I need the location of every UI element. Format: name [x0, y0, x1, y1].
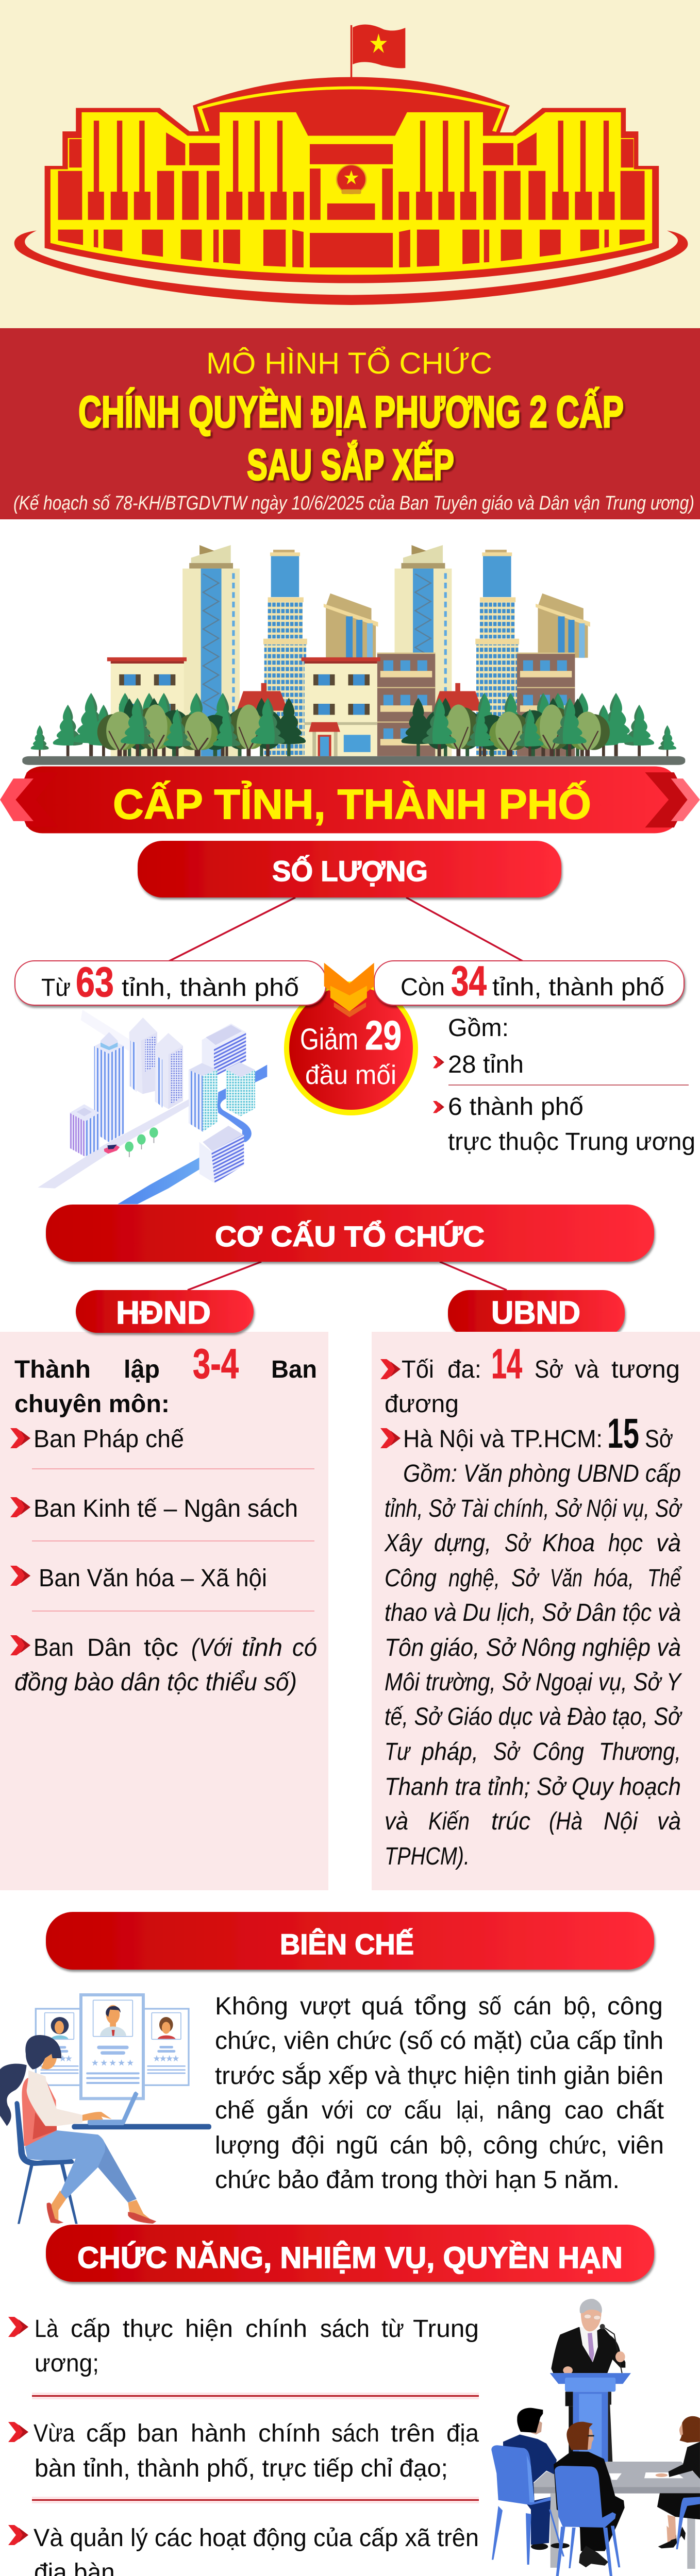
text block: list of departments: Công: [532, 1738, 584, 1766]
desk: [72, 2124, 211, 2129]
text block: staffing: số: [478, 1993, 502, 2020]
text block: list of departments: Xây: [384, 1530, 423, 1557]
item: ethnic committee: tộc: [144, 1634, 178, 1662]
table: [529, 2462, 700, 2569]
text block: staffing: chất: [616, 2097, 664, 2124]
title line 1: MÔ HÌNH TỔ CHỨC: [206, 347, 492, 380]
text block: staffing: Không: [215, 1993, 288, 2020]
building silhouette: [45, 77, 659, 283]
intro: 3-4 committees: 3-4: [193, 1341, 239, 1387]
item: maximum 14 departments: [380, 1341, 680, 1418]
pill: remaining 34 provinces: 34: [451, 958, 487, 1005]
item: implementing level: thực: [123, 2315, 173, 2343]
icon: parliament building with flag: [14, 24, 688, 305]
text block: list of departments: Khoa: [542, 1530, 595, 1557]
heading: Cơ cấu tổ chức: CƠ CẤU TỔ CHỨC: [215, 1220, 485, 1252]
item: implementing level: Là: [35, 2315, 58, 2343]
text block: list of departments: Kiến: [428, 1808, 470, 1835]
text block: list of departments: [384, 1460, 682, 1870]
podium: [550, 2373, 631, 2462]
text block: list of departments: TPHCM).: [385, 1843, 470, 1870]
chair: [14, 2101, 78, 2224]
connector lines: quantity: [169, 897, 523, 961]
item: implementing level: cấp: [71, 2315, 110, 2343]
item: maximum 14 departments: 14: [491, 1341, 522, 1387]
attendee left: [491, 2408, 570, 2565]
item: implementing level: hiện: [185, 2315, 233, 2343]
item: Hanoi and HCMC 15 departments: 15: [607, 1410, 639, 1457]
text block: staffing: với: [322, 2097, 354, 2124]
item: maximum 14 departments: Tối: [402, 1356, 434, 1383]
text block: list of departments: và: [385, 1808, 408, 1835]
CV cards: [36, 1995, 189, 2098]
pill: from 63 provinces: [15, 959, 326, 1006]
item: ethnic committee: có: [292, 1634, 317, 1662]
text block: staffing: bộ,: [440, 2132, 473, 2159]
badge: Giảm 29 đầu mối: [284, 981, 418, 1115]
item: ethnic committee: [10, 1634, 317, 1696]
panel: HĐND: [0, 1332, 328, 1890]
text block: staffing: tổng: [414, 1993, 467, 2020]
item: implementing level: [8, 2315, 479, 2377]
text block: staffing: trước sắp xếp và thực hiện tinh giản biên: [215, 2062, 663, 2090]
text block: staffing: chức,: [549, 2132, 607, 2159]
text block: list of departments: học: [608, 1530, 643, 1557]
pill: remaining 34 provinces: Còn: [401, 974, 445, 1001]
text block: list of departments: Tư: [385, 1738, 411, 1766]
text block: staffing: gắn: [266, 2096, 309, 2124]
item: policy issuing level: hành: [191, 2420, 246, 2447]
text block: staffing: cơ: [366, 2097, 392, 2124]
badge: Giảm 29 đầu mối: 29: [365, 1012, 402, 1058]
illustration: cityscape: [22, 545, 685, 765]
swoosh under the building: [14, 231, 688, 305]
item: implementing level: sách: [320, 2315, 370, 2343]
item: ethnic committee: (Với: [191, 1634, 232, 1662]
illustration: meeting with speaker: [491, 2299, 700, 2576]
intro: 3-4 committees: [14, 1341, 317, 1418]
heading: Số lượng: SỐ LƯỢNG: [272, 855, 428, 887]
text block: staffing: chức bảo đảm trong thời hạn 5 năm.: [215, 2166, 620, 2194]
text block: list of departments: nghệ,: [448, 1565, 500, 1592]
item: maximum 14 departments: Sở: [535, 1356, 563, 1383]
text block: list of departments: Thương,: [599, 1738, 681, 1766]
text block: staffing: bộ,: [563, 1993, 597, 2020]
title line 3: SAU SẮP XẾP: [247, 440, 454, 489]
item: maximum 14 departments: đa:: [447, 1356, 481, 1383]
connector lines: structure: [188, 1262, 507, 1290]
laptop: [88, 2091, 139, 2125]
text block: staffing: cấu: [404, 2097, 442, 2124]
text block: staffing: vượt: [300, 1993, 351, 2020]
intro: 3-4 committees: lập: [124, 1356, 160, 1383]
illustration: woman reviewing CVs: [0, 1995, 211, 2224]
text block: staffing: [215, 1993, 664, 2194]
text block: list of departments: trúc: [491, 1808, 530, 1835]
text block: staffing: viên: [618, 2132, 664, 2159]
intro: 3-4 committees: Ban: [271, 1356, 317, 1383]
text block: list of departments: Thể: [647, 1565, 682, 1592]
text block: list of departments: Thanh tra tỉnh; Sở Quy hoạch: [385, 1773, 681, 1801]
list: composition: [433, 1014, 695, 1156]
intro: 3-4 committees: chuyên môn:: [14, 1391, 170, 1418]
panel: UBND: [372, 1332, 700, 1890]
item: implementing level: ương;: [35, 2350, 99, 2377]
item: ethnic committee: Ban: [34, 1634, 74, 1662]
pill: from 63 provinces: 63: [76, 959, 114, 1006]
text block: list of departments: Sở: [511, 1565, 540, 1592]
item: policy issuing level: sách: [331, 2420, 379, 2447]
speaker: [551, 2299, 625, 2462]
text block: list of departments: và: [656, 1530, 681, 1557]
item: policy issuing level: bàn tỉnh, thành phố, trực tiếp chỉ đạo;: [35, 2455, 448, 2482]
heading: Chức năng, nhiệm vụ, quyền hạn: [46, 2225, 654, 2282]
item: policy issuing level: Vừa: [34, 2420, 75, 2447]
item: policy issuing level: trên: [391, 2420, 435, 2447]
item: implementing level: chính: [245, 2315, 307, 2343]
text block: staffing: nâng: [496, 2097, 552, 2124]
text block: staffing: công: [607, 1993, 663, 2020]
badge: Giảm 29 đầu mối: Giảm: [300, 1023, 358, 1056]
car: [104, 1145, 120, 1154]
text block: staffing: lại,: [456, 2097, 485, 2124]
item: policy issuing level: [8, 2420, 479, 2482]
list: composition: Gồm:: [448, 1014, 509, 1042]
text block: list of departments: Tôn giáo, Sở Nông nghiệp và: [385, 1634, 681, 1662]
text block: list of departments: dựng,: [434, 1530, 491, 1557]
item: commune management: Và quản lý các hoạt động của cấp xã trên: [34, 2524, 479, 2552]
pill: from 63 provinces: Từ: [41, 974, 71, 1002]
list: composition: trực thuộc Trung ương: [448, 1128, 695, 1156]
item: implementing level: từ: [381, 2315, 404, 2343]
heading: HĐND: HĐND: [116, 1295, 211, 1331]
text block: staffing: cao: [564, 2097, 604, 2124]
item: culture committee: Ban Văn hóa – Xã hội: [39, 1565, 267, 1592]
text block: list of departments: Sở: [493, 1738, 521, 1766]
item: maximum 14 departments: đương: [385, 1391, 459, 1418]
item: maximum 14 departments: và: [575, 1356, 599, 1383]
icon: national emblem: [337, 165, 366, 194]
item: ethnic committee: tỉnh: [242, 1634, 282, 1662]
pill: remaining 34 provinces: tỉnh, thành phố: [492, 974, 664, 1001]
item: policy issuing level: địa: [446, 2420, 479, 2447]
heading: Biên chế: BIÊN CHẾ: [280, 1928, 414, 1960]
text block: list of departments: Nội: [604, 1808, 638, 1835]
pill: from 63 provinces: tỉnh, thành phố: [122, 974, 299, 1002]
banner: Cấp tỉnh, thành phố: [0, 766, 700, 833]
text block: staffing: lượng: [215, 2132, 280, 2159]
text block: list of departments: pháp,: [421, 1738, 478, 1766]
item: commune management: [8, 2524, 479, 2576]
item: ethnic committee: đồng bào dân tộc thiểu số): [14, 1669, 297, 1696]
title band: [0, 328, 700, 519]
icon: downward chevrons: [324, 963, 374, 1018]
banner: Cấp tỉnh, thành phố: CẤP TỈNH, THÀNH PHỐ: [113, 781, 591, 828]
icon: national flag: [351, 24, 405, 77]
street trees: [125, 1127, 158, 1157]
item: maximum 14 departments: tương: [611, 1356, 680, 1383]
text block: staffing: đội: [291, 2132, 325, 2159]
intro: 3-4 committees: Thành: [14, 1356, 91, 1383]
text block: staffing: chức, viên chức (số có mặt) của cấp tỉnh: [215, 2027, 663, 2055]
illustration: isometric city: [38, 1010, 267, 1204]
item: Hanoi and HCMC 15 departments: [380, 1410, 673, 1457]
heading: Số lượng: [138, 841, 561, 897]
heading: Chức năng, nhiệm vụ, quyền hạn: CHỨC NĂNG, NHIỆM VỤ, QUYỀN HẠN: [77, 2241, 623, 2275]
header background: [0, 0, 700, 328]
badge: Giảm 29 đầu mối: đầu mối: [305, 1060, 396, 1090]
text block: staffing: quá: [361, 1993, 403, 2020]
list: composition: 28 tỉnh: [448, 1051, 524, 1078]
tower group: [70, 1018, 255, 1183]
text block: staffing: chế: [215, 2097, 255, 2124]
list: composition: 6 thành phố: [448, 1093, 584, 1121]
text block: staffing: cán: [513, 1993, 552, 2020]
item: ethnic committee: Dân: [87, 1634, 131, 1662]
heading: UBND: [448, 1290, 625, 1336]
woman: [0, 2035, 156, 2224]
attendee right: [656, 2416, 700, 2549]
item: implementing level: Trung: [413, 2315, 479, 2343]
heading: Biên chế: [46, 1912, 654, 1970]
item: economy committee: Ban Kinh tế – Ngân sách: [34, 1495, 298, 1522]
text block: list of departments: hóa,: [594, 1565, 634, 1592]
text block: list of departments: Văn: [550, 1565, 582, 1592]
heading: HĐND: [76, 1290, 254, 1333]
item: policy issuing level: chính: [258, 2420, 321, 2447]
attendee center: [554, 2422, 625, 2576]
item: legal committee: Ban Pháp chế: [34, 1426, 184, 1453]
item: policy issuing level: cấp: [86, 2420, 126, 2447]
text block: list of departments: Công: [385, 1565, 437, 1592]
text block: list of departments: và: [657, 1808, 681, 1835]
text block: staffing: cán: [390, 2132, 428, 2159]
pill: remaining 34 provinces: [374, 958, 684, 1005]
heading: Cơ cấu tổ chức: [46, 1205, 654, 1262]
item: Hanoi and HCMC 15 departments: Sở: [645, 1426, 673, 1453]
item: Hanoi and HCMC 15 departments: Hà Nội và TP.HCM:: [403, 1426, 603, 1453]
item: policy issuing level: ban: [137, 2420, 178, 2447]
text block: list of departments: (Hà: [549, 1808, 582, 1835]
text block: staffing: công: [483, 2132, 538, 2159]
heading: UBND: UBND: [491, 1295, 580, 1331]
text block: list of departments: Sở: [505, 1530, 531, 1557]
text block: staffing: ngũ: [336, 2132, 378, 2159]
